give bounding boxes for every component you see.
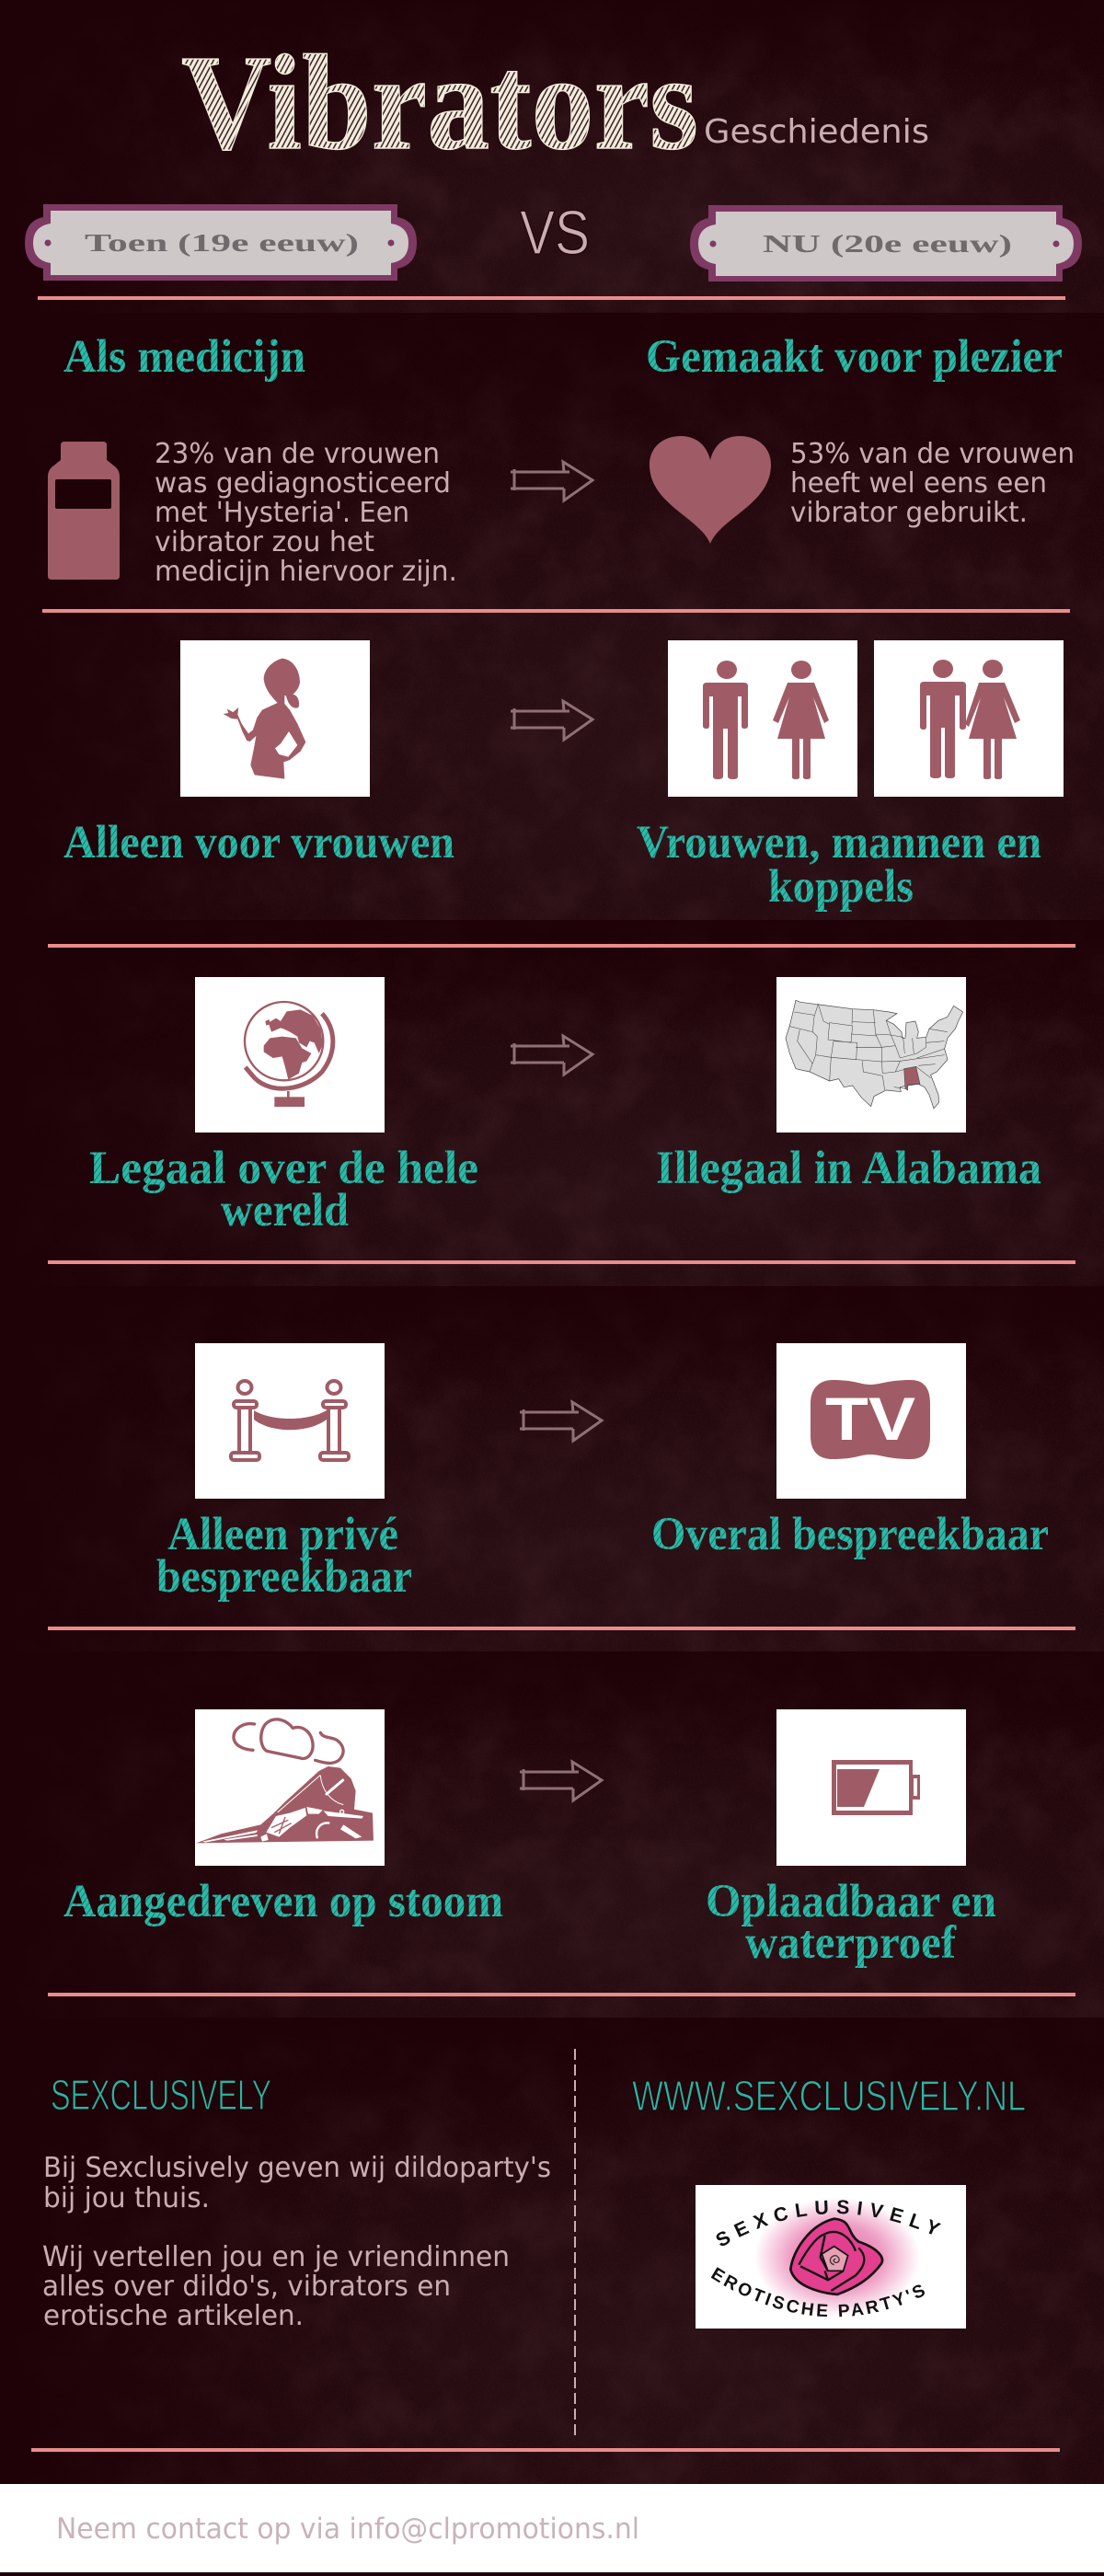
icon: tv: TV <box>825 1385 915 1453</box>
icon: tv <box>776 1343 966 1499</box>
heading: illegaal in alabama: Illegaal in Alabama <box>656 1143 1041 1194</box>
text: hysteria: 23% van de vrouwen <box>155 438 440 470</box>
vs label: VS <box>520 198 590 268</box>
arrow 1 <box>511 462 592 500</box>
plaque: then <box>25 204 417 281</box>
text: hysteria: was gediagnosticeerd <box>155 467 451 500</box>
icon: woman <box>180 640 370 797</box>
plaque: now <box>690 205 1082 282</box>
icon: velvet rope <box>195 1343 385 1499</box>
text: 53 percent: 53% van de vrouwen <box>790 438 1075 470</box>
heading: overal bespreekbaar: Overal bespreekbaar <box>651 1509 1049 1560</box>
heading: oplaadbaar en waterproef <box>706 1876 996 1969</box>
heading: legaal over de hele wereld <box>89 1143 478 1236</box>
logo: sexclusively rose: SEXCLUSIVELY <box>716 2200 941 2247</box>
icon: man and woman <box>668 640 857 797</box>
heading: alleen prive bespreekbaar <box>156 1509 412 1603</box>
heading: aangedreven op stoom: Aangedreven op stoom <box>63 1876 503 1927</box>
heading: alleen prive bespreekbaar: Alleen privé <box>167 1509 398 1560</box>
text: about sexclusively: bij jou thuis. <box>43 2182 210 2214</box>
heading: als medicijn: Als medicijn <box>63 331 305 383</box>
icon: medicine bottle <box>48 442 120 580</box>
text: hysteria: medicijn hiervoor zijn. <box>155 556 457 588</box>
icon: heart <box>650 436 771 544</box>
heading: alleen voor vrouwen: Alleen voor vrouwen <box>63 817 454 868</box>
plaque: then: Toen (19e eeuw) <box>85 229 359 257</box>
icon: battery <box>776 1709 966 1866</box>
logo: sexclusively rose <box>696 2185 966 2329</box>
heading: oplaadbaar en waterproef: Oplaadbaar en <box>706 1876 996 1927</box>
dividers <box>31 296 1075 2452</box>
icon: steam train <box>195 1709 385 1866</box>
heading: alleen prive bespreekbaar: bespreekbaar <box>156 1551 412 1603</box>
text: 53 percent: heeft wel eens een <box>790 467 1047 500</box>
arrow 2 <box>511 701 592 740</box>
title: Vibrators <box>181 28 698 178</box>
heading: sexclusively: SEXCLUSIVELY <box>51 2071 271 2119</box>
arrow 5 <box>520 1762 602 1800</box>
heading: gemaakt voor plezier: Gemaakt voor plezier <box>646 331 1063 383</box>
text: about sexclusively: Wij vertellen jou en je vriendinnen <box>42 2241 510 2273</box>
text: about sexclusively: Bij Sexclusively geven wij dildoparty's <box>43 2152 551 2184</box>
text: about sexclusively: alles over dildo's, vibrators en <box>42 2271 451 2303</box>
heading: vrouwen mannen koppels <box>637 817 1041 913</box>
text: about sexclusively <box>42 2152 551 2332</box>
arrow 4 <box>520 1402 602 1441</box>
heading: vrouwen mannen koppels: koppels <box>768 861 914 913</box>
logo: sexclusively rose: EROTISCHE PARTY'S <box>710 2267 925 2317</box>
text: 53 percent: vibrator gebruikt. <box>790 497 1028 529</box>
arrow 3 <box>511 1036 592 1075</box>
dashed divider <box>574 2049 576 2436</box>
text: hysteria: vibrator zou het <box>155 526 374 558</box>
text: hysteria: met 'Hysteria'. Een <box>155 497 409 529</box>
icon: couple <box>874 640 1064 797</box>
footer bar <box>0 2484 1104 2572</box>
heading: legaal over de hele wereld: Legaal over de hele <box>89 1143 478 1194</box>
heading: oplaadbaar en waterproef: waterproef <box>745 1917 957 1969</box>
icon: us map <box>776 977 966 1133</box>
icon: globe <box>195 977 385 1133</box>
text: 53 percent <box>790 438 1075 529</box>
heading: vrouwen mannen koppels: Vrouwen, mannen en <box>637 817 1041 868</box>
subtitle: Geschiedenis <box>704 113 929 151</box>
footer bar: Neem contact op via info@clpromotions.nl <box>56 2513 639 2546</box>
heading: legaal over de hele wereld: wereld <box>221 1185 349 1236</box>
text: about sexclusively: erotische artikelen. <box>43 2300 304 2332</box>
text: hysteria <box>155 438 457 588</box>
plaque: now: NU (20e eeuw) <box>763 230 1012 258</box>
